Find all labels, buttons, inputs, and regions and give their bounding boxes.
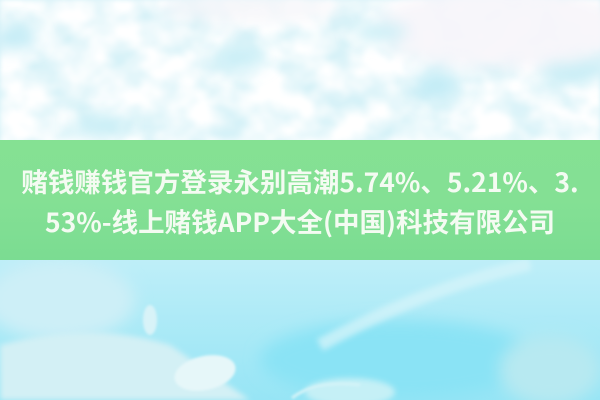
title: 赌钱赚钱官方登录永别高潮5.74%、5.21%、3. [21, 161, 579, 200]
panel: green title band [0, 140, 600, 260]
title: 53%-线上赌钱APP大全(中国)科技有限公司 [45, 201, 555, 240]
title [21, 161, 579, 240]
